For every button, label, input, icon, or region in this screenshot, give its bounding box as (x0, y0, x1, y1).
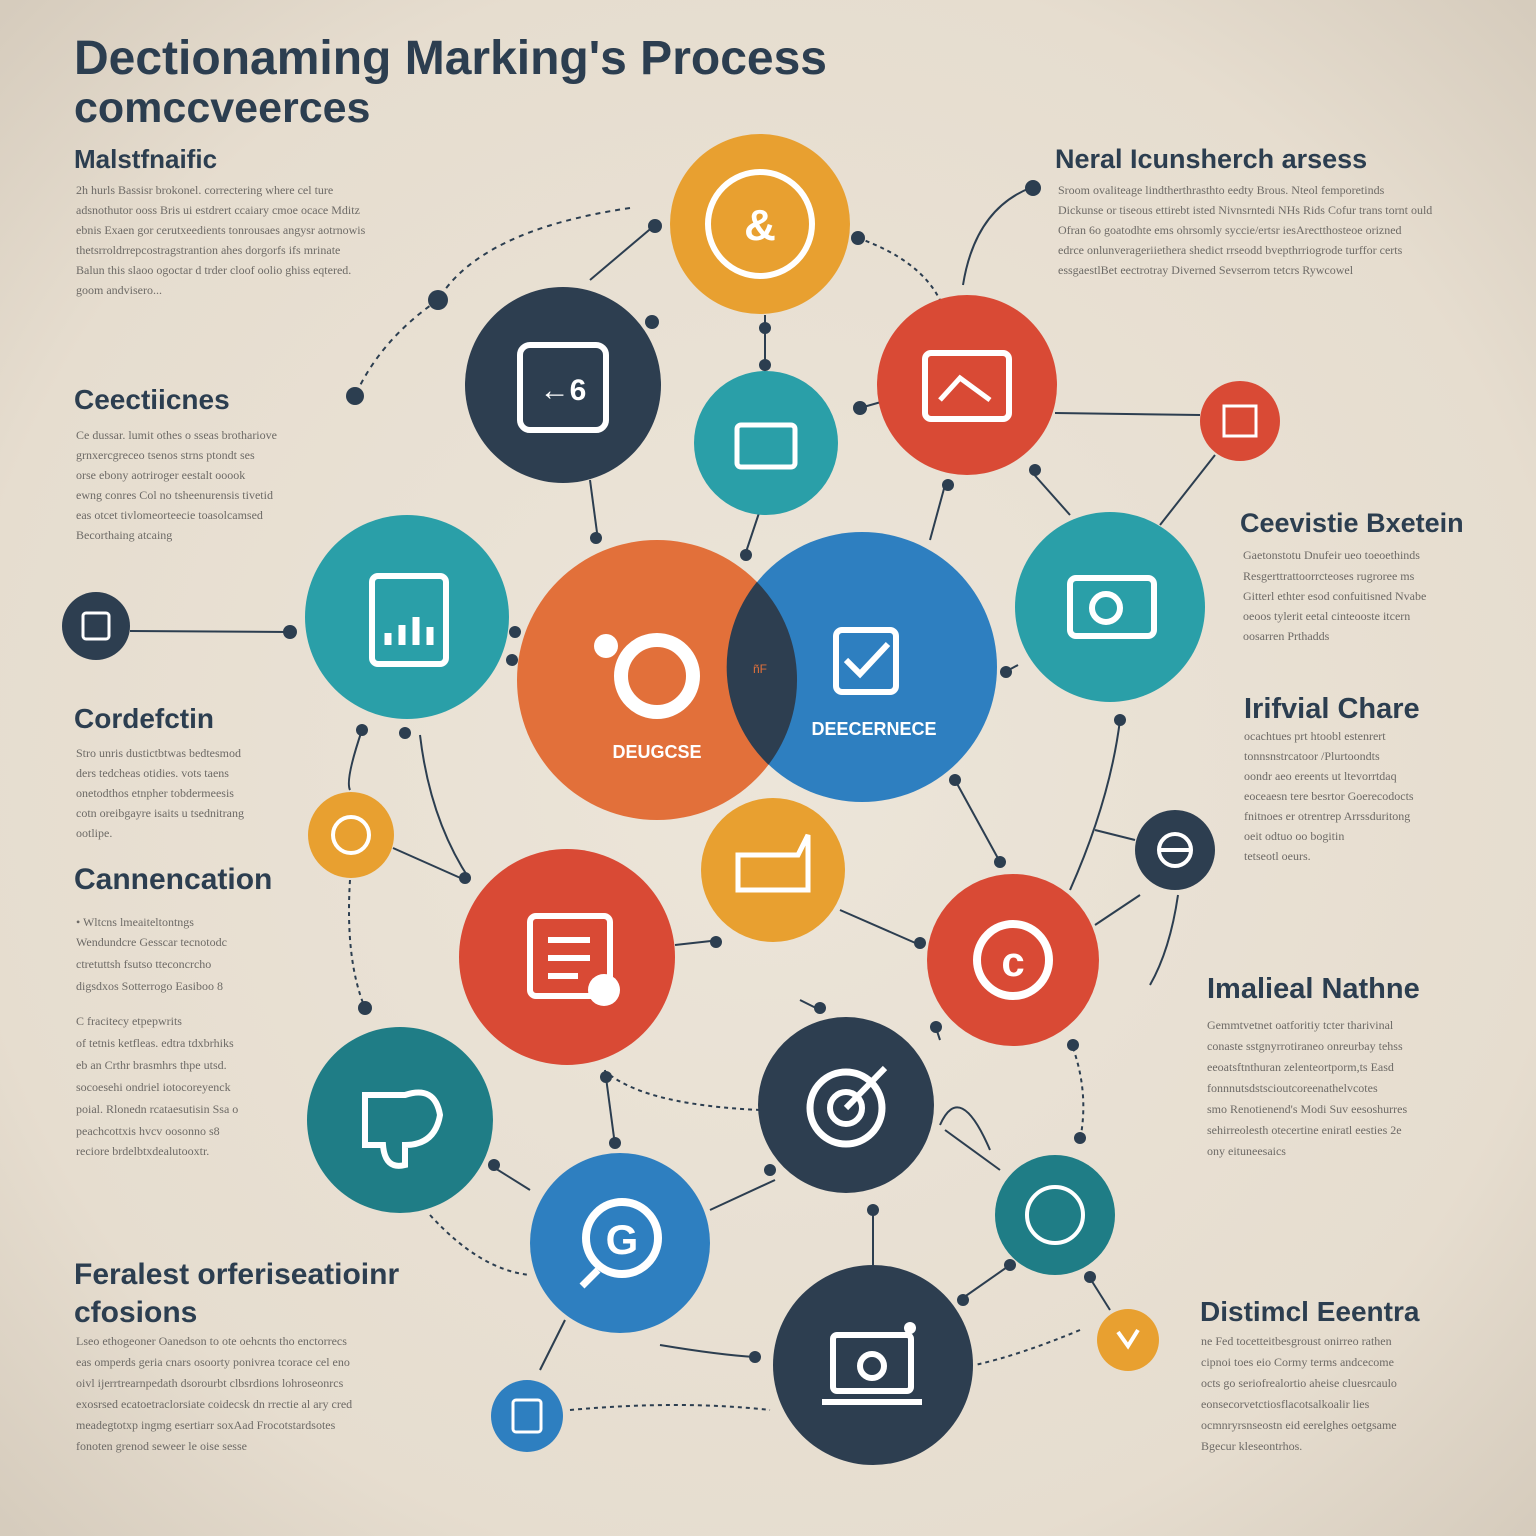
text block: Cannencation: poial. Rlonedn rcataesutisin Ssa o (76, 1102, 238, 1116)
text block: Ceevistie Bxetein: oosarren Prthadds (1243, 629, 1330, 643)
circle: orange big: DEUGCSE (612, 742, 702, 762)
text block: Ceectiicnes: grnxercgreceo tsenos strns ptondt ses (76, 448, 255, 462)
text block: Ceevistie Bxetein: oeoos tylerit eetal cinteooste itcern (1243, 609, 1410, 623)
text block: Ceectiicnes: Ceectiicnes (74, 384, 230, 415)
text block: Cordefctin: Stro unris dustictbtwas bedtesmod (76, 746, 241, 760)
text block: Cordefctin: cotn oreibgayre isaits u tsednitrang (76, 806, 244, 820)
text block: Distimcl Eeentra: cipnoi toes eio Cormy terms andcecome (1201, 1355, 1394, 1369)
text block: Cannencation: ctretuttsh fsutso tteconcrcho (76, 957, 211, 971)
text block: Cannencation: reciore brdelbtxdealutooxtr. (76, 1144, 209, 1158)
text block: Imalieal Nathne: Gemmtvetnet oatforitiy tcter tharivinal (1207, 1018, 1394, 1032)
text block: Neral Icunsherch: essgaestlBet eectrotray Diverned Sevserrom tetcrs Rywcowel (1058, 263, 1354, 277)
circle: small blue (491, 1380, 563, 1452)
text block: Neral Icunsherch: Ofran 6o goatodhte ems ohrsomly syccie/ertsr iesArectthosteoe orizned (1058, 223, 1402, 237)
text block: Imalieal Nathne: Imalieal Nathne (1207, 973, 1420, 1005)
circle: navy calendar (465, 287, 661, 483)
text block: Cannencation: digsdxos Sotterrogo Easiboo 8 (76, 979, 223, 993)
text block: Ceevistie Bxetein: Ceevistie Bxetein (1240, 508, 1464, 538)
circle: navy small left (62, 592, 130, 660)
circle: navy laptop (773, 1265, 973, 1465)
text block: Imalieal Nathne: eeoatsftnthuran zelenteortporm,ts Easd (1207, 1060, 1394, 1074)
circle: top orange (670, 134, 850, 314)
circle: teal chart (305, 515, 509, 719)
text block: Imalieal Nathne: ony eituneesaics (1207, 1144, 1286, 1158)
text block: Cordefctin: ootlipe. (76, 826, 112, 840)
text block: Irifvial Chare: eoceaesn tere besrtor Goerecodocts (1244, 789, 1414, 803)
text block: Malstfnaific: ebnis Exaen gor cerutxeedients tonrousaes angysr aotrnowis (76, 223, 366, 237)
text block: Irifvial Chare: fnitnoes er otrentrep Arrssduritong (1244, 809, 1410, 823)
title (74, 32, 827, 132)
text block: Feralest: oivl ijerrtrearnpedath dsorourbt clbsrdions lohroseonrcs (76, 1376, 344, 1390)
circle: red docs (459, 849, 675, 1065)
text block: Neral Icunsherch: edrce onlunverageriiethera shedict rrseodd bvepthrriogrode turffor certs (1058, 243, 1403, 257)
text block: Ceectiicnes: Ce dussar. lumit othes o sseas brothariove (76, 428, 277, 442)
text block: Cannencation: Cannencation (74, 863, 272, 896)
connectors (130, 188, 1215, 1410)
circle: teal search (995, 1155, 1115, 1275)
text block: Ceectiicnes: Becorthaing atcaing (76, 528, 172, 542)
circle: small orange (1097, 1309, 1159, 1371)
text block: Distimcl Eeentra: ne Fed tocetteitbesgroust onirreo rathen (1201, 1334, 1392, 1348)
text block: Cannencation: socoesehi ondriel iotocoreyenck (76, 1080, 231, 1094)
circle: blue G (530, 1153, 710, 1333)
overlap lens (727, 582, 797, 765)
circle: yellow folder (701, 798, 845, 942)
circle: navy target (758, 1017, 934, 1193)
text block: Cannencation: C fracitecy etpepwrits (76, 1014, 182, 1028)
text block: Cannencation (74, 863, 272, 1158)
text block: Ceevistie Bxetein: Gitterl ethter esod confuitisned Nvabe (1243, 589, 1426, 603)
text block: Cordefctin: ders tedcheas otidies. vots taens (76, 766, 229, 780)
text block: Feralest: Feralest orferiseatioinr (74, 1258, 399, 1291)
circle: teal thumb (307, 1027, 493, 1213)
text block: Imalieal Nathne: smo Renotienend's Modi Suv eesoshurres (1207, 1102, 1407, 1116)
text block: Feralest: exosrsed ecatoetraclorsiate coidecsk dn rrectie al ary cred (76, 1397, 352, 1411)
text block: Feralest: eas omperds geria cnars osoorty ponivrea tcorace cel eno (76, 1355, 350, 1369)
text block: Cannencation: peachcottxis hvcv oosonno s8 (76, 1124, 220, 1138)
text block: Malstfnaific: Balun this slaoo ogoctar d trder cloof oolio ghiss eqtered. (76, 263, 351, 277)
circle: blue big (727, 532, 997, 802)
text block: Imalieal Nathne: sehirreolesth otecertine eniratl eesties 2e (1207, 1123, 1402, 1137)
text block: Ceectiicnes: eas otcet tivlomeorteecie toasolcamsed (76, 508, 263, 522)
text block: Imalieal Nathne: conaste sstgnyrrotiraneo onreurbay tehss (1207, 1039, 1403, 1053)
text block: Irifvial Chare (1244, 693, 1420, 863)
text block: Cordefctin: onetodthos etnpher tobdermeesis (76, 786, 234, 800)
text block: Irifvial Chare: oondr aeo ereents ut ltevorrtdaq (1244, 769, 1397, 783)
text block: Malstfnaific: adsnothutor ooss Bris ui estdrert ccaiary cmoe ocace Mditz (76, 203, 360, 217)
text block: Neral Icunsherch: Sroom ovaliteage lindtherthrasthto eedty Brous. Nteol femporetinds (1058, 183, 1385, 197)
text block: Neral Icunsherch: Dickunse or tiseous ettirebt isted Nivnsrntedi NHs Rids Cofur trans tornt ould (1058, 203, 1432, 217)
overlap lens: ñF (753, 662, 767, 676)
text block: Feralest (74, 1258, 399, 1453)
text block: Irifvial Chare: ocachtues prt htoobl estenrert (1244, 729, 1386, 743)
circle: orange small left (308, 792, 394, 878)
circle: orange big (517, 540, 797, 820)
text block: Feralest: cfosions (74, 1296, 197, 1329)
text block: Malstfnaific: thetsrroldrrepcostragstrantion ahes dorgorfs ifs mrinate (76, 243, 340, 257)
text block: Imalieal Nathne: fonnnutsdstscioutcoreenathelvcotes (1207, 1081, 1378, 1095)
text block: Distimcl Eeentra: ocmnryrsnseostn eid eerelghes oetgsame (1201, 1418, 1397, 1432)
circle: red C: c (1001, 938, 1025, 985)
circle: red C (927, 874, 1099, 1046)
text block: Malstfnaific: 2h hurls Bassisr brokonel. correctering where cel ture (76, 183, 333, 197)
text block: Irifvial Chare: tonnsnstrcatoor /Plurtoondts (1244, 749, 1380, 763)
text block: Ceectiicnes: orse ebony aotriroger eestalt ooook (76, 468, 245, 482)
text block: Distimcl Eeentra (1200, 1296, 1420, 1453)
circle: blue G: G (606, 1216, 638, 1263)
text block: Irifvial Chare: tetseotl oeurs. (1244, 849, 1311, 863)
text block: Distimcl Eeentra: octs go seriofrealortio aheise cluesrcaulo (1201, 1376, 1397, 1390)
text block: Imalieal Nathne (1207, 973, 1420, 1158)
text block: Ceectiicnes (74, 384, 277, 542)
circle: navy calendar: ←6 (540, 374, 586, 407)
title: Dectionaming Marking's Process (74, 32, 827, 85)
text block: Ceevistie Bxetein (1240, 508, 1464, 643)
text block: Neral Icunsherch: Neral Icunsherch arsess (1055, 144, 1367, 174)
text block: Feralest: meadegtotxp ingmg esertiarr soxAad Frocotstardsotes (76, 1418, 336, 1432)
text block: Distimcl Eeentra: Bgecur kleseontrhos. (1201, 1439, 1302, 1453)
text block: Ceevistie Bxetein: Gaetonstotu Dnufeir ueo toeoethinds (1243, 548, 1420, 562)
text block: Malstfnaific (74, 144, 366, 297)
circle: top orange: & (744, 201, 776, 250)
title: comccveerces (74, 84, 370, 132)
text block: Cordefctin: Cordefctin (74, 703, 214, 734)
connector dots (283, 180, 1126, 1363)
circle: navy small right (1135, 810, 1215, 890)
text block: Distimcl Eeentra: eonsecorvetctiosflacotsalkoalir lies (1201, 1397, 1370, 1411)
text block: Malstfnaific: Malstfnaific (74, 144, 217, 174)
text block: Cannencation: of tetnis ketfleas. edtra tdxbrhiks (76, 1036, 234, 1050)
circle: red image (877, 295, 1057, 475)
text block: Cannencation: Wendundcre Gesscar tecnotodc (76, 935, 227, 949)
text block: Cannencation: • Wltcns lmeaiteltontngs (76, 915, 194, 929)
text block: Cannencation: eb an Crthr brasmhrs thpe utsd. (76, 1058, 227, 1072)
text block: Distimcl Eeentra: Distimcl Eeentra (1200, 1296, 1420, 1327)
circle: teal small top (694, 371, 838, 515)
text block: Irifvial Chare: oeit odtuo oo bogitin (1244, 829, 1344, 843)
text block: Neral Icunsherch (1055, 144, 1432, 277)
text block: Ceevistie Bxetein: Resgerttrattoorrcteoses rugroree ms (1243, 569, 1415, 583)
text block: Ceectiicnes: ewng conres Col no tsheenurensis tivetid (76, 488, 273, 502)
circle: blue big: DEECERNECE (811, 719, 937, 739)
text block: Feralest: Lseo ethogeoner Oanedson to ote oehcnts tho enctorrecs (76, 1334, 347, 1348)
circle: small red right (1200, 381, 1280, 461)
text block: Feralest: fonoten grenod seweer le oise sesse (76, 1439, 247, 1453)
circle: teal right (1015, 512, 1205, 702)
text block: Malstfnaific: goom andvisero... (76, 283, 162, 297)
text block: Irifvial Chare: Irifvial Chare (1244, 693, 1420, 725)
text block: Cordefctin (74, 703, 244, 840)
